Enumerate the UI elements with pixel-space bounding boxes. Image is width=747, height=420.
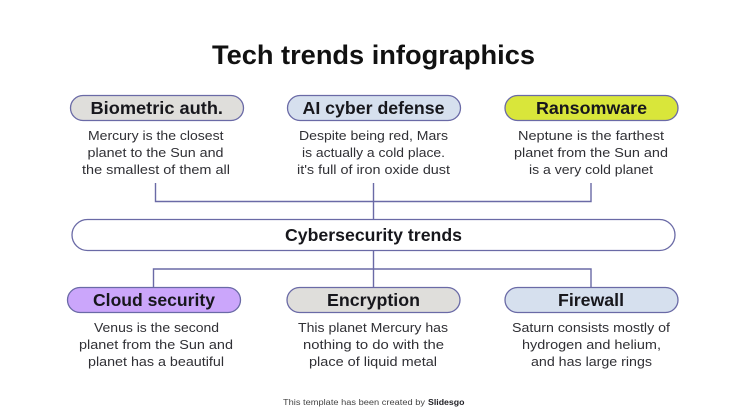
connector: bottom branches [154, 251, 591, 287]
pill: Cloud security [68, 288, 240, 312]
text: Cloud security description [79, 321, 233, 369]
footer credit: This template has been created by [283, 398, 425, 407]
text: Ransomware description [514, 129, 668, 177]
footer credit: Slidesgo [428, 398, 465, 407]
panel: Encryption [287, 288, 460, 369]
central bar: Cybersecurity trends: Cybersecurity trends [285, 225, 462, 245]
panel: AI cyber defense [288, 96, 460, 177]
text: AI cyber defense description: is actually a cold place. [302, 146, 445, 160]
pill: Firewall [505, 288, 678, 312]
pill: Ransomware: Ransomware [536, 98, 647, 118]
pill: Cloud security: Cloud security [93, 290, 215, 310]
panel: Firewall [505, 288, 678, 369]
pill: AI cyber defense: AI cyber defense [302, 98, 445, 118]
central bar: Cybersecurity trends [72, 220, 675, 250]
text: Firewall description: and has large rings [531, 355, 652, 369]
text: Biometric description: planet to the Sun and [88, 146, 224, 160]
text: AI cyber defense description [297, 129, 451, 177]
text: AI cyber defense description: Despite being red, Mars [299, 129, 448, 143]
pill: Encryption: Encryption [327, 290, 420, 310]
footer credit [283, 398, 465, 407]
pill: Biometric auth.: Biometric auth. [90, 98, 223, 118]
text: Biometric description [82, 129, 230, 177]
pill: Biometric auth. [70, 96, 244, 120]
pill: Ransomware [505, 96, 678, 120]
text: Firewall description [512, 321, 671, 369]
text: Cloud security description: Venus is the second [94, 321, 219, 335]
text: Biometric description: the smallest of them all [82, 163, 230, 177]
text: Ransomware description: is a very cold planet [529, 163, 654, 177]
text: AI cyber defense description: it's full of iron oxide dust [297, 163, 451, 177]
text: Ransomware description: Neptune is the farthest [518, 129, 665, 143]
title: Tech trends infographics [212, 40, 535, 70]
text: Firewall description: Saturn consists mostly of [512, 321, 671, 335]
text: Encryption description [298, 321, 448, 369]
text: Cloud security description: planet has a beautiful [88, 355, 224, 369]
text: Cloud security description: planet from the Sun and [79, 338, 233, 352]
text: Biometric description: Mercury is the closest [88, 129, 224, 143]
panel: Cloud security [68, 288, 240, 369]
pill: AI cyber defense [288, 96, 460, 120]
text: Encryption description: nothing to do with the [303, 338, 444, 352]
panel: Ransomware [505, 96, 678, 177]
text: Encryption description: This planet Mercury has [298, 321, 448, 335]
pill: Firewall: Firewall [558, 290, 624, 310]
text: Encryption description: place of liquid metal [309, 355, 437, 369]
text: Firewall description: hydrogen and helium, [522, 338, 661, 352]
pill: Encryption [287, 288, 460, 312]
panel: Biometric auth. [70, 96, 244, 177]
connector: top branches [156, 183, 591, 219]
text: Ransomware description: planet from the Sun and [514, 146, 668, 160]
